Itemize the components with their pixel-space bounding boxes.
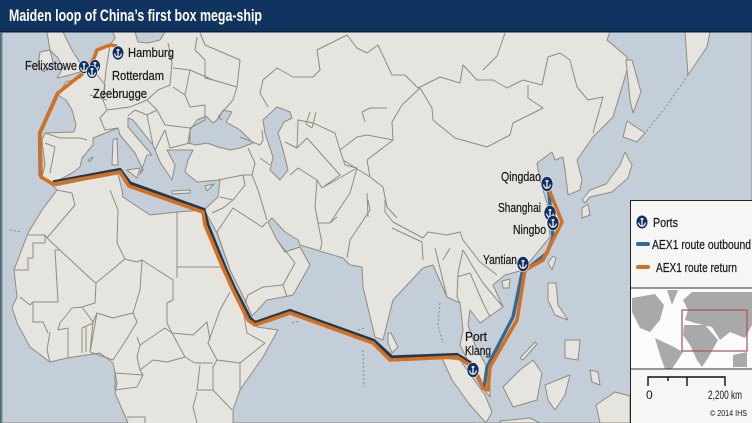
small island chains	[10, 75, 688, 387]
icon: Ningbo anchor	[547, 216, 559, 230]
locator map	[631, 288, 752, 369]
icon: Shanghai anchor	[544, 206, 556, 220]
port labels: Zeebrugge	[93, 86, 147, 101]
seas: Baltic	[135, 32, 165, 43]
port labels: Port	[465, 329, 487, 344]
scale bar: 0	[646, 388, 653, 402]
port labels	[25, 45, 546, 358]
icon: Qingdao anchor	[541, 176, 553, 192]
title: Maiden loop of China’s first box mega-ship	[9, 7, 262, 25]
port labels: Felixstowe	[25, 58, 77, 73]
borders: Europe	[45, 33, 240, 173]
port labels: Yantian	[483, 252, 517, 267]
seas: Mediterranean	[52, 118, 220, 215]
port labels: Rotterdam	[112, 68, 164, 83]
port labels: Klang	[465, 343, 491, 358]
legend: ports	[636, 215, 678, 230]
title bar	[0, 0, 752, 32]
route: AEX1 outbound	[40, 92, 553, 388]
seas: Indian and Pacific Oceans	[204, 32, 752, 423]
port labels: Qingdao	[501, 169, 541, 184]
icon: Port Klang anchor	[467, 362, 479, 378]
icon: Zeebrugge anchor	[86, 66, 98, 78]
icon: Hamburg anchor	[112, 46, 124, 60]
icon: Rotterdam anchor	[90, 60, 100, 72]
legend: return	[636, 260, 737, 275]
port labels: Ningbo	[513, 222, 546, 237]
port markers	[78, 46, 559, 378]
legend: ports: Ports	[653, 215, 678, 230]
seas: Black Sea	[188, 110, 253, 150]
port labels: Hamburg	[128, 45, 174, 60]
lakes	[306, 33, 505, 128]
legend panel	[630, 200, 752, 423]
borders: Central Asia, Russia, China	[260, 35, 603, 317]
borders: Africa	[14, 190, 265, 423]
route: AEX1 return	[40, 45, 562, 390]
left frame edge	[0, 32, 2, 423]
islands	[38, 32, 645, 423]
icon: Yantian anchor	[517, 256, 529, 272]
seas: Atlantic and North Sea	[2, 32, 128, 423]
seas: Caspian Sea	[263, 107, 292, 180]
port labels: Shanghai	[498, 200, 541, 215]
borders: Middle East and Arabia	[212, 130, 295, 303]
scale bar	[646, 377, 742, 402]
copyright: © 2014 IHS	[710, 409, 747, 418]
icon: Felixstowe anchor	[78, 60, 90, 74]
